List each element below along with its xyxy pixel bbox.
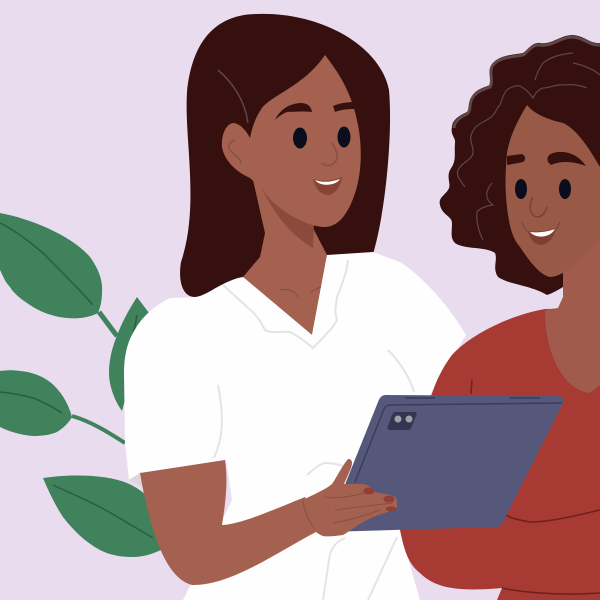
collarbone lines: [280, 286, 323, 297]
body: right woman red top: [400, 308, 600, 600]
hair highlights: right woman: [454, 37, 600, 240]
neck: left woman: [243, 180, 327, 335]
right woman: [400, 35, 600, 600]
ear: left woman: [222, 123, 250, 178]
facial features: left woman: [275, 102, 354, 195]
hair: left woman: [180, 14, 390, 297]
under-sleeve shade: [129, 473, 143, 487]
left woman: [124, 14, 466, 600]
curly hair: right woman: [440, 35, 600, 295]
tablet camera: [388, 412, 417, 430]
plant with green leaves: [0, 213, 165, 557]
tablet: [326, 395, 563, 532]
neck shadow: [260, 185, 314, 248]
hair strand: [218, 70, 248, 123]
face: left woman: [250, 55, 361, 227]
shirt: left woman: [124, 252, 466, 600]
tablet inner edge: [355, 403, 562, 482]
shirt creases: [214, 260, 414, 600]
facial features: right woman: [507, 152, 586, 245]
ear inner line: [229, 140, 241, 163]
hand holding tablet: [303, 459, 397, 536]
arm: left woman: [140, 460, 320, 585]
neck: right woman: [545, 235, 600, 393]
tablet buttons: [405, 397, 540, 399]
face: right woman: [506, 105, 600, 277]
red top creases: [471, 380, 600, 594]
